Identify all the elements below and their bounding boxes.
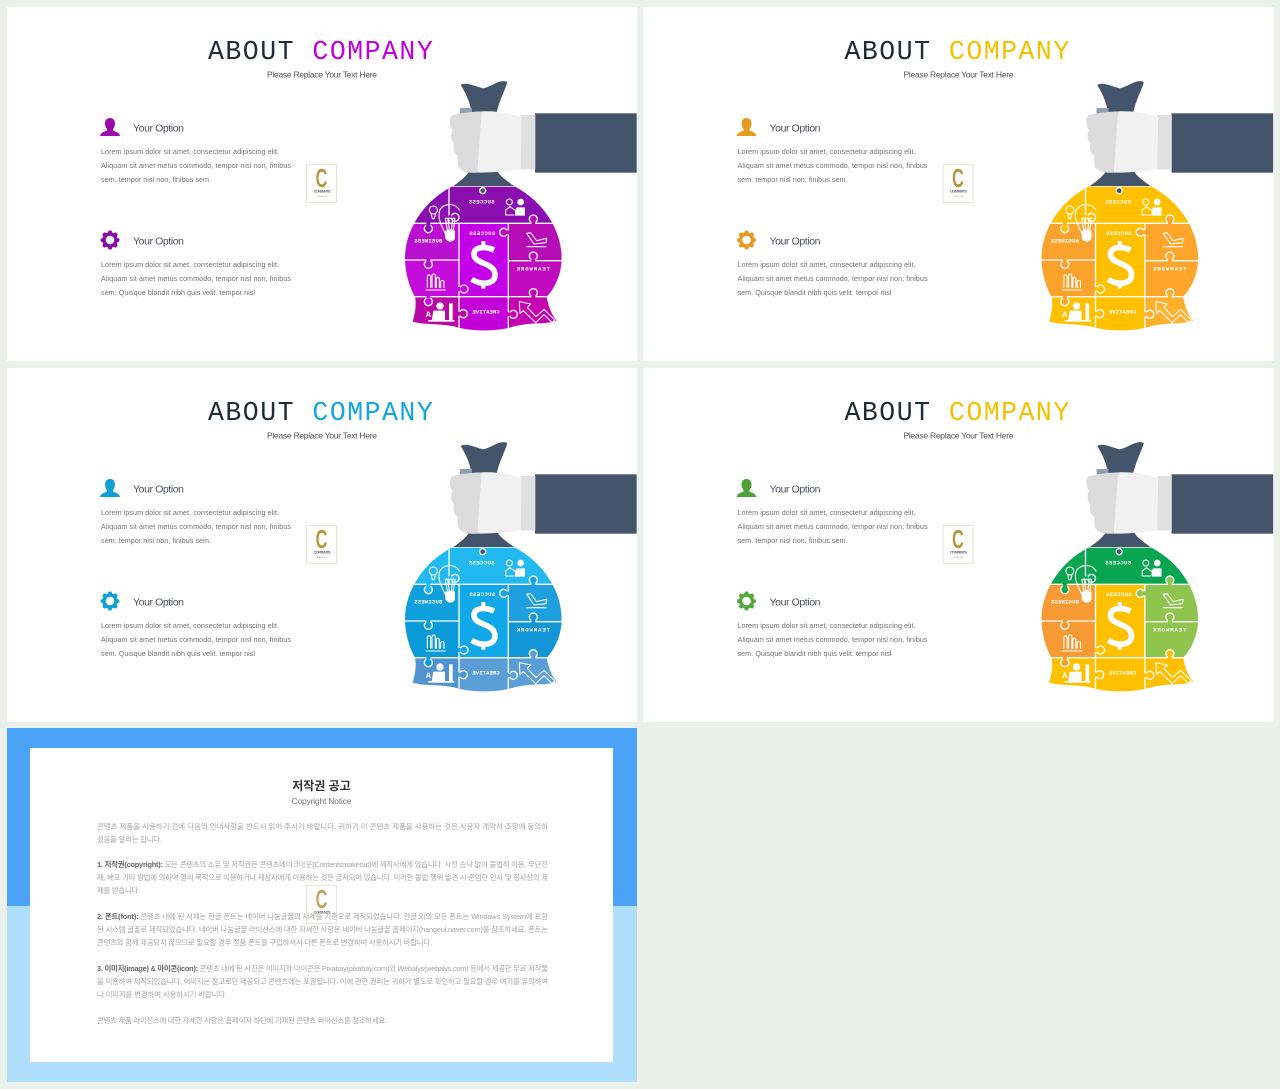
illustration: hand holding puzzle money bag: SUCCESS [1105, 230, 1132, 237]
logo [306, 524, 336, 564]
text block one: sem. tempor nisl non, finibus sem. [101, 536, 211, 545]
illustration: hand holding puzzle money bag: SUCCESS [469, 591, 495, 598]
illustration: hand holding puzzle money bag: BUSINESS [1050, 238, 1079, 245]
illustration: hand holding puzzle money bag: A [1062, 310, 1068, 320]
illustration: hand holding puzzle money bag: TEAMWORK [516, 266, 550, 273]
illustration: hand holding puzzle money bag: A [426, 671, 432, 681]
icon: person [100, 479, 120, 497]
notice closing line: 콘텐츠 제품 라이선스에 대한 자세한 사항은 홈페이지 하단에 기재된 콘텐츠 라이선스를 참조하세요. [97, 1016, 387, 1025]
illustration: hand holding puzzle money bag: SUCCESS [1105, 591, 1132, 598]
text block two [738, 260, 928, 297]
option heading one: Your Option [770, 484, 821, 496]
illustration: hand holding puzzle money bag [1036, 442, 1273, 698]
logo [943, 163, 973, 202]
illustration: hand holding puzzle money bag: SUCCESS [468, 199, 495, 206]
panel: purple about company slide [7, 7, 637, 361]
title: ABOUT COMPANY [844, 37, 1071, 67]
logo watermark: CONTENTS [314, 910, 331, 914]
notice section 1: 재, 배포 기타 방법에 의하여 영리 목적으로 이용하거나 제삼자에게 이용하는 것은 금지되어 있습니다. 이러한 불법 행위 발견 시 준엄한 민사 및 형사상의 제 [97, 873, 548, 882]
illustration: hand holding puzzle money bag: CREATIVE [1108, 669, 1136, 676]
illustration: hand holding puzzle money bag: TEAMWORK [1153, 627, 1186, 634]
logo: C [952, 524, 964, 554]
logo: C [316, 163, 328, 193]
text block two: Lorem ipsum dolor sit amet, consectetur adipiscing elit. [101, 260, 279, 269]
text block one: sem. tempor nisl non, finibus sem. [101, 175, 211, 184]
text block two [101, 621, 291, 658]
logo [306, 163, 336, 202]
text block two: Lorem ipsum dolor sit amet, consectetur adipiscing elit. [738, 260, 916, 269]
notice section 3: 을 이용하여 제작되었습니다. 이미지는 참고로만 제공되고 콘텐츠에는 포함됩니다. 이에 관한 권리는 귀하가 별도로 확인하고 필요할 경우 여기를 유의하여 [97, 977, 548, 986]
text block one: Lorem ipsum dolor sit amet, consectetur adipiscing elit. [101, 147, 279, 156]
text block two: sem. Quisque blandit nibh quis velit. tempor nisl [738, 288, 892, 297]
notice intro: 셨음을 알리는 합니다. [97, 835, 162, 844]
text block one: Lorem ipsum dolor sit amet, consectetur adipiscing elit. [738, 147, 916, 156]
text block one [101, 508, 291, 545]
notice section 2: 된 시스템 글꼴로 제작되었습니다. 네이버 나눔글꼴 라이선스에 대한 자세한 사항은 네이버 나눔글꼴 홈페이지(hangeul.naver.com)를 참조하세요. 폰트는 [97, 925, 548, 934]
logo watermark [306, 884, 336, 924]
illustration: hand holding puzzle money bag: BUSINESS [414, 238, 442, 245]
option heading one: Your Option [770, 122, 821, 134]
icon: person [736, 479, 756, 497]
illustration: hand holding puzzle money bag [400, 81, 637, 337]
option heading two: Your Option [133, 236, 184, 248]
title: ABOUT COMPANY [208, 37, 434, 67]
panel: blue about company slide [7, 368, 637, 722]
text block two: Aliquam sit amet metus commodo, tempor nisl non, finibus [738, 635, 928, 644]
icon: gear [737, 592, 756, 610]
notice section 1: 재를 받습니다. [97, 886, 140, 895]
illustration: hand holding puzzle money bag: CREATIVE [472, 669, 500, 676]
notice section 1: 1. 저작권(copyright): 모든 콘텐츠의 소유 및 저작권은 콘텐츠메이크아웃(Contentsmakeout)에 제작사에게 있습니다. 사전 승낙 없이 불법적 이용, 무단전 [97, 860, 548, 869]
icon: person [736, 118, 756, 136]
illustration: hand holding puzzle money bag: SUCCESS [468, 560, 495, 567]
title: ABOUT COMPANY [208, 398, 434, 428]
illustration: hand holding puzzle money bag: BUSINESS [1050, 599, 1079, 606]
text block two [101, 260, 291, 297]
title: ABOUT COMPANY [844, 398, 1071, 428]
text block two: Lorem ipsum dolor sit amet, consectetur adipiscing elit. [738, 621, 916, 630]
logo: C [316, 524, 328, 554]
icon: person [100, 118, 120, 136]
text block two: sem. Quisque blandit nibh quis velit. tempor nisl [101, 649, 255, 658]
notice section 3: 나 이미지를 변경하여 사용하시기 바랍니다. [97, 990, 227, 999]
text block one [738, 147, 928, 184]
text block two [738, 621, 928, 658]
text block one [738, 508, 928, 545]
logo: CONTENTS [314, 550, 331, 554]
text block one: Aliquam sit amet metus commodo, tempor nisl non, finibus [101, 161, 291, 170]
text block one: Aliquam sit amet metus commodo, tempor nisl non, finibus [738, 161, 928, 170]
option heading one: Your Option [133, 122, 184, 134]
illustration: hand holding puzzle money bag: TEAMWORK [516, 627, 550, 634]
panel: multicolour about company slide [644, 368, 1274, 722]
logo: CONTENTS [950, 550, 967, 554]
notice section 1 [97, 860, 548, 895]
subtitle: Please Replace Your Text Here [904, 70, 1014, 80]
logo [943, 524, 973, 564]
illustration: hand holding puzzle money bag: SUCCESS [1105, 199, 1131, 206]
illustration: hand holding puzzle money bag: BUSINESS [414, 599, 442, 606]
logo: make out [317, 195, 327, 198]
panel: copyright notice [7, 728, 637, 1082]
logo watermark: C [316, 884, 328, 914]
text block two: sem. Quisque blandit nibh quis velit. tempor nisl [738, 649, 892, 658]
copyright subheading: Copyright Notice [292, 796, 352, 806]
illustration: hand holding puzzle money bag [1036, 81, 1273, 337]
illustration: hand holding puzzle money bag: CREATIVE [472, 308, 500, 315]
text block two: sem. Quisque blandit nibh quis velit. tempor nisl [101, 288, 255, 297]
subtitle: Please Replace Your Text Here [267, 70, 377, 80]
logo: CONTENTS [314, 188, 331, 194]
text block two: Aliquam sit amet metus commodo, tempor nisl non, finibus [101, 274, 291, 283]
notice section 3: 3. 이미지(image) & 아이콘(icon): 콘텐츠 내에 된 사진은 이미지와 아이콘은 Pixabay(pixabay.com)와 Webalys(webalys.com) 등에서 제공한 무료 저작물 [97, 964, 548, 973]
text block one: sem. tempor nisl non, finibus sem. [738, 536, 848, 545]
icon: gear [737, 231, 756, 249]
text block one: Lorem ipsum dolor sit amet, consectetur adipiscing elit. [738, 508, 916, 517]
illustration: hand holding puzzle money bag: TEAMWORK [1153, 266, 1186, 273]
notice section 2: 2. 폰트(font): 콘텐츠 내에 된 서체는 한글 폰트는 네이버 나눔글꼴의 서체를 기준으로 제작되었습니다. 한글 외의 모든 폰트는 Windows System에 포함 [97, 912, 548, 921]
illustration: hand holding puzzle money bag: A [1062, 671, 1068, 681]
notice section 3 [97, 964, 548, 999]
option heading two: Your Option [133, 596, 184, 608]
text block one: Aliquam sit amet metus commodo, tempor nisl non, finibus [738, 522, 928, 531]
subtitle: Please Replace Your Text Here [904, 430, 1014, 440]
option heading two: Your Option [770, 236, 821, 248]
logo: make out [953, 195, 964, 198]
illustration: hand holding puzzle money bag: SUCCESS [469, 230, 495, 237]
text block two: Aliquam sit amet metus commodo, tempor nisl non, finibus [738, 274, 928, 283]
notice section 2: 콘텐츠와 함께 제공되지 않으므로 필요할 경우 정품 폰트를 구입하셔서 다른 폰트로 변경하여 사용하시기 바랍니다. [97, 938, 432, 947]
logo: C [952, 163, 964, 193]
notice section 2 [97, 912, 548, 947]
copyright heading: 저작권 공고 [292, 778, 351, 793]
illustration: hand holding puzzle money bag: SUCCESS [1105, 560, 1131, 567]
text block one [101, 147, 291, 184]
text block one: Aliquam sit amet metus commodo, tempor nisl non, finibus [101, 522, 291, 531]
icon: gear [101, 592, 119, 610]
logo: make out [953, 556, 964, 559]
notice intro [97, 822, 548, 844]
illustration: hand holding puzzle money bag: A [426, 310, 432, 320]
option heading one: Your Option [133, 484, 184, 496]
text block two: Aliquam sit amet metus commodo, tempor nisl non, finibus [101, 635, 291, 644]
logo: CONTENTS [950, 188, 967, 194]
illustration: hand holding puzzle money bag: CREATIVE [1108, 308, 1136, 315]
logo: make out [317, 556, 327, 559]
text block one: Lorem ipsum dolor sit amet, consectetur adipiscing elit. [101, 508, 279, 517]
icon: gear [101, 231, 119, 249]
subtitle: Please Replace Your Text Here [267, 430, 377, 440]
text block one: sem. tempor nisl non, finibus sem. [738, 175, 848, 184]
panel: yellow about company slide [644, 7, 1274, 361]
text block two: Lorem ipsum dolor sit amet, consectetur adipiscing elit. [101, 621, 279, 630]
option heading two: Your Option [770, 596, 821, 608]
illustration: hand holding puzzle money bag [400, 442, 637, 698]
notice intro: 콘텐츠 제품을 사용하기 전에 다음의 안내사항을 반드시 읽어 주시기 바랍니다. 귀하가 이 콘텐츠 제품을 사용하는 것은 사용자 계약서 조항에 동의하 [97, 822, 548, 831]
